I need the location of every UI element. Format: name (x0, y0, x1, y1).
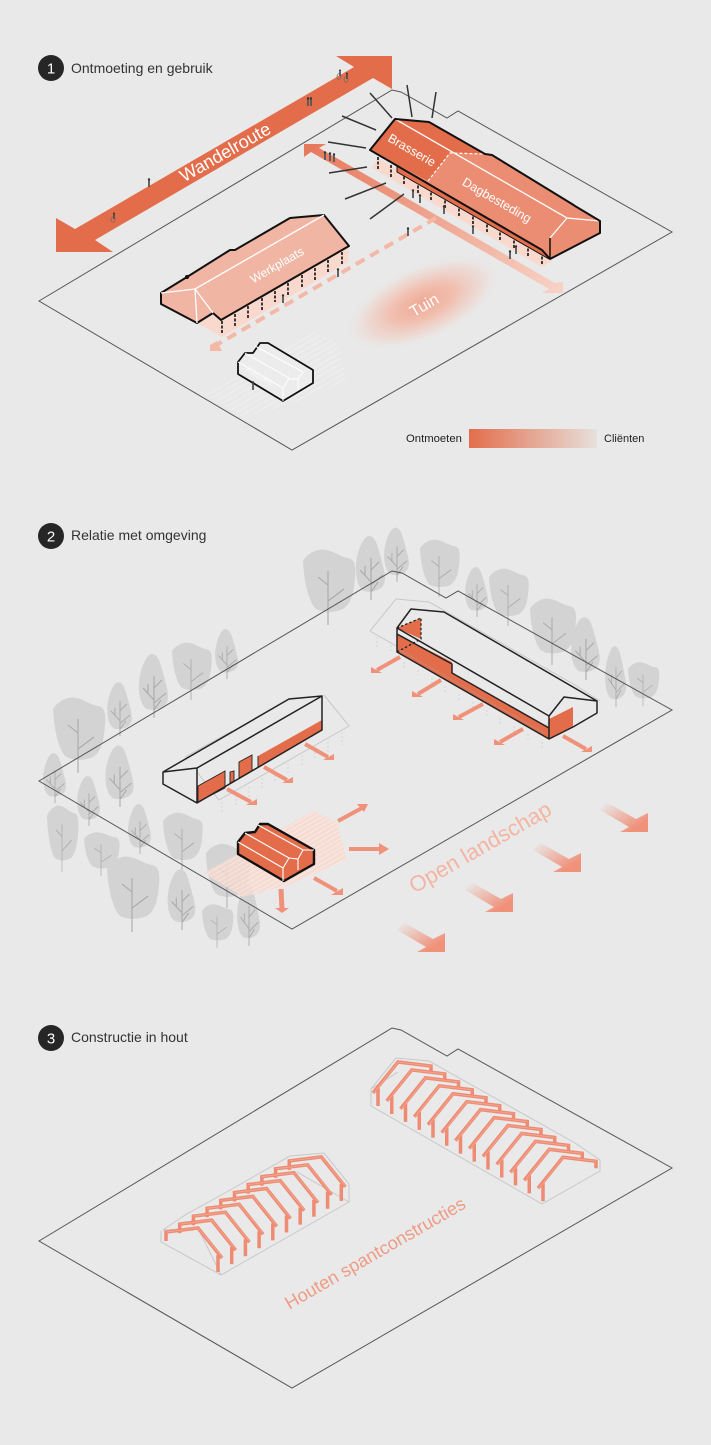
plot outline (39, 571, 672, 929)
building: werkplaats (161, 215, 349, 337)
building: brasserie en dagbesteding: Dagbesteding (460, 175, 534, 226)
heading 3: Constructie in hout (71, 1029, 188, 1045)
rays: ontmoeting (328, 85, 436, 219)
building: werkplaats (163, 695, 349, 813)
arrows: werkplaats (227, 744, 334, 805)
building: klein gebouw (204, 331, 347, 417)
truss structure: links (161, 1153, 349, 1275)
arrow: gestippelde route (210, 218, 436, 351)
arrow: wandelroute: Wandelroute (176, 119, 274, 186)
heading 2: 2 (47, 528, 55, 546)
heading 2 (38, 523, 206, 549)
arrows: klein gebouw (275, 804, 389, 913)
heading 1: Ontmoeting en gebruik (71, 60, 214, 76)
zone: tuin: Tuin (407, 291, 442, 321)
label: houten spantconstructies: Houten spantconstructies (281, 1193, 469, 1313)
truss structure: rechts (371, 1058, 600, 1204)
heading 3: 3 (47, 1030, 55, 1048)
building: brasserie en dagbesteding: Brasserie (385, 131, 438, 170)
building: groot gebouw (370, 599, 600, 748)
zone: tuin (331, 234, 515, 372)
plot outline (39, 1028, 672, 1388)
building: klein gebouw: Kassen (244, 364, 275, 387)
panel: constructie in hout (38, 1025, 672, 1388)
building: rood klein gebouw (238, 824, 314, 881)
label: open landschap: Open landschap (404, 796, 556, 898)
legend: Ontmoeten (406, 433, 462, 445)
legend (406, 429, 644, 448)
arrow: pad langs brasserie (304, 144, 563, 293)
arrows: groot gebouw (371, 657, 592, 752)
legend: Cliënten (604, 433, 644, 445)
arrows: open landschap (397, 802, 648, 952)
plot outline (39, 90, 672, 450)
arrow: wandelroute (56, 56, 392, 252)
building: werkplaats: Werkplaats (248, 244, 306, 286)
panel: relatie met omgeving (38, 523, 672, 952)
trees (43, 528, 659, 948)
heading 3 (38, 1025, 188, 1051)
heading 2: Relatie met omgeving (71, 527, 206, 543)
panel: ontmoeting en gebruik (38, 55, 672, 450)
building: brasserie en dagbesteding (370, 119, 600, 267)
figures: bezoekers (111, 70, 517, 390)
zone: gearceerd terrein (204, 811, 347, 897)
heading 1: 1 (47, 60, 55, 78)
heading 1 (38, 55, 214, 81)
